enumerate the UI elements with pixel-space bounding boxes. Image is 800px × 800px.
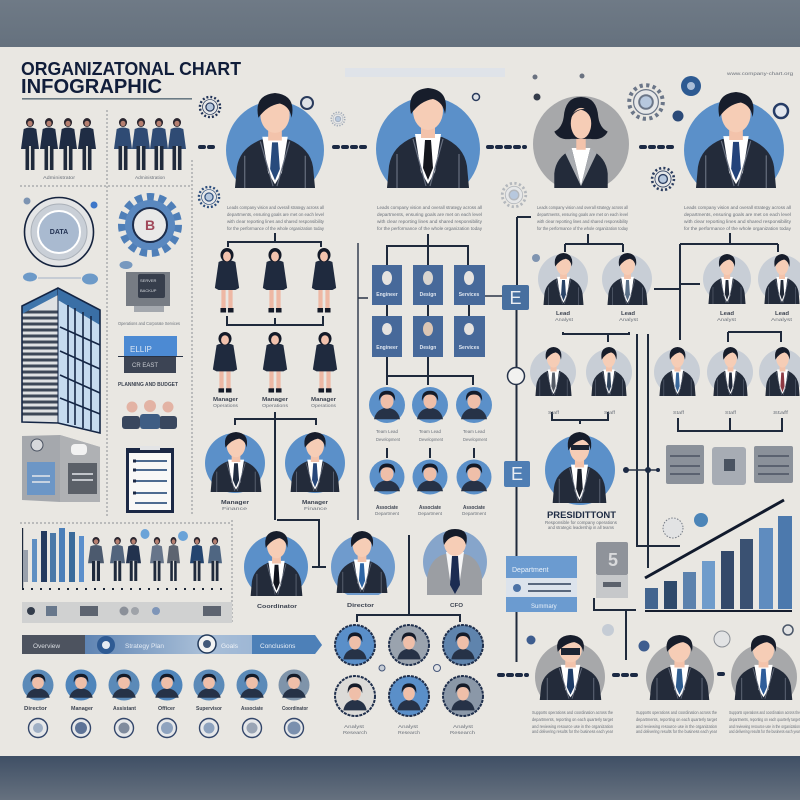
trend arrow — [645, 500, 784, 578]
blue profile cards: Engineer — [376, 292, 398, 298]
team circles row 1: Development — [376, 437, 401, 442]
connector node dots — [623, 467, 660, 473]
staff avatar row — [22, 670, 310, 712]
card: gray number: 5 — [608, 550, 618, 570]
manager bust left — [205, 432, 265, 511]
team circles row 1: Team Lead — [376, 429, 398, 434]
staff avatar row: Supervisor — [196, 706, 222, 712]
executive 3 — [533, 96, 629, 192]
small staff labels: Lead — [556, 311, 570, 317]
decorative gears — [199, 68, 794, 207]
staff avatar row: Director — [24, 706, 47, 712]
E badge 1: E — [509, 288, 522, 308]
legend strip — [22, 602, 232, 623]
description 2 — [377, 205, 483, 231]
description 3: with clear reporting lines and shared responsibility — [537, 219, 629, 224]
description 4: for the performance of the whole organization today — [684, 226, 792, 231]
staff labels: Operations — [311, 403, 337, 408]
title: INFOGRAPHIC — [21, 76, 162, 98]
description 1: for the performance of the whole organization today — [227, 226, 325, 231]
title — [21, 59, 241, 100]
small staff labels: Lead — [775, 311, 789, 317]
icon: team — [122, 400, 177, 429]
manager bust left: Finance — [222, 506, 248, 511]
bottom description 3 — [729, 710, 800, 734]
president label: and strategic leadership in all teams — [548, 525, 615, 530]
staff labels — [213, 397, 337, 408]
team circles row 2: Associate — [463, 505, 485, 511]
process arrow — [22, 635, 322, 654]
connector dots: bottom row — [499, 674, 727, 675]
bottom executive 3 — [731, 635, 797, 700]
president label: Responsible for company operations — [545, 520, 618, 525]
staff avatar row: Assistant — [113, 706, 136, 712]
portrait labels: Analyst — [453, 724, 474, 729]
staff labels: Operations — [262, 403, 289, 408]
small staff labels: Staff — [725, 410, 737, 415]
card: gray number — [596, 542, 628, 598]
portrait labels: Research — [343, 730, 368, 735]
small icons — [532, 254, 708, 538]
background: top band — [0, 0, 800, 47]
description 3 — [537, 205, 629, 231]
blue profile cards: Services — [459, 345, 480, 351]
process arrow: Goals — [221, 643, 239, 650]
label: CFO — [450, 603, 463, 609]
bottom description 1: Supports operations and coordination across the — [532, 710, 613, 715]
label: Coordinator — [257, 604, 297, 610]
connector dots: top row — [200, 145, 675, 149]
description 1 — [227, 205, 325, 231]
staff avatar row: Officer — [158, 706, 175, 712]
bottom description 1: departments, reporting on each quarterly target — [532, 717, 614, 722]
bottom executive 2 — [646, 635, 714, 700]
mid executive 1 — [244, 531, 308, 599]
team circles row 2: Associate — [376, 505, 398, 511]
icon: clipboard — [126, 446, 174, 513]
E badge 2 — [504, 461, 530, 487]
description 4: with clear reporting lines and shared responsibility — [684, 219, 792, 224]
blue profile cards: Engineer — [376, 345, 398, 351]
small staff labels: Lead — [720, 311, 734, 317]
team circles row 2: Department — [375, 511, 400, 516]
icon: clouds — [23, 261, 132, 284]
decorative gears: www.company-chart.org — [727, 71, 794, 76]
small staff labels: Staff — [604, 410, 616, 415]
team circles row 1: Development — [419, 437, 444, 442]
staff avatar row: Coordinator — [282, 706, 308, 712]
description 1: departments, ensuring goals are met on each level — [227, 212, 324, 217]
staff avatar row: Manager — [71, 706, 93, 712]
people group 2: Administration — [135, 175, 165, 180]
manager bust right — [285, 432, 345, 511]
bottom description 1: and reviewing resource use in the organization — [532, 724, 613, 729]
portrait labels: Analyst — [398, 724, 419, 729]
executive 2 — [376, 88, 480, 188]
E badge 2: E — [511, 464, 523, 484]
blue profile cards — [372, 265, 485, 357]
chart: bars and staff — [22, 528, 224, 590]
blue profile cards: Services — [459, 292, 480, 298]
bottom executive 1 — [535, 635, 605, 700]
info card: blue: Summary — [531, 604, 557, 610]
manager bust left: Manager — [221, 500, 249, 506]
bottom small icons — [526, 624, 793, 652]
people group 1 — [21, 118, 96, 180]
team circles row 2: Department — [462, 511, 487, 516]
staff row: women 1 — [215, 248, 336, 312]
process arrow: Overview — [33, 643, 60, 650]
card: blue report: CR EAST — [132, 363, 158, 369]
description 2: Leads company vision and overall strategy across all — [377, 205, 482, 210]
info card: blue — [506, 556, 577, 612]
bottom description 2: Supports operations and coordination across the — [636, 710, 717, 715]
portrait labels: Research — [450, 730, 476, 735]
caption: Operations and Corporate Services — [118, 321, 181, 326]
portrait ring grid — [335, 625, 483, 716]
manager bust right: Finance — [304, 506, 328, 511]
people group 2 — [114, 118, 186, 180]
portrait labels: Analyst — [344, 724, 365, 729]
staff labels: Manager — [311, 397, 336, 403]
icon: data badge: DATA — [50, 229, 68, 236]
team circles row 2: Associate — [419, 505, 441, 511]
manager bust right: Manager — [302, 500, 328, 506]
background: bottom band — [0, 756, 800, 800]
team circles row 2: Department — [418, 511, 443, 516]
icon: blue gear — [122, 197, 178, 253]
description 1: Leads company vision and overall strategy across all — [227, 205, 324, 210]
staff labels: Manager — [213, 397, 238, 403]
title: ORGANIZATONAL CHART — [21, 59, 241, 79]
staff busts: upper row — [538, 253, 800, 305]
blue profile cards: Design — [420, 292, 436, 298]
mid executive 2 — [331, 531, 395, 599]
description 3: Leads company vision and overall strategy across all — [537, 205, 628, 210]
bar chart: growth — [645, 500, 792, 611]
description 4: Leads company vision and overall strategy across all — [684, 205, 791, 210]
staff row: women 2 — [213, 332, 337, 393]
description 2: with clear reporting lines and shared responsibility — [377, 219, 483, 224]
description 4 — [684, 205, 792, 231]
portrait labels — [343, 724, 476, 735]
staff labels: Operations — [213, 403, 239, 408]
connector lines — [227, 217, 782, 662]
bottom description 2: and delivering results for the business each year — [636, 729, 717, 734]
label: Director — [347, 603, 374, 609]
info card: blue: Department — [512, 567, 549, 574]
dotted panel dividers — [20, 110, 232, 623]
team circles row 1: Development — [463, 437, 488, 442]
staff avatar row: Associate — [241, 706, 263, 712]
icon: server — [126, 272, 170, 312]
small staff labels: Staff — [773, 410, 789, 415]
people group 1: Administrator — [43, 175, 76, 180]
president — [545, 432, 615, 505]
executive 1 — [226, 93, 324, 188]
team circles row 2 — [370, 460, 492, 516]
bottom description 1 — [532, 710, 614, 734]
icon: blue gear: B — [145, 217, 155, 233]
icon: server: BACKUP — [140, 288, 157, 293]
description 3: departments, ensuring goals are met on each level — [537, 212, 628, 217]
bottom description 2: departments, reporting on each quarterly target — [636, 717, 718, 722]
mid executive 3 — [423, 529, 487, 595]
E badge 1 — [502, 285, 529, 310]
icon: office building — [22, 288, 100, 433]
small staff labels: Analyst — [619, 317, 639, 322]
bottom description 2: and reviewing resource use in the organization — [636, 724, 717, 729]
bottom description 2 — [636, 710, 718, 734]
small staff labels: Staff — [673, 410, 685, 415]
small staff labels: Analyst — [717, 317, 737, 322]
gray info cards — [666, 445, 793, 485]
description 2: departments, ensuring goals are met on each level — [377, 212, 482, 217]
staff busts: lower row — [530, 347, 800, 396]
bottom description 1: and delivering results for the business each year — [532, 729, 613, 734]
card: blue report — [118, 336, 183, 373]
icon: server: SERVER — [140, 278, 156, 283]
description 1: with clear reporting lines and shared responsibility — [227, 219, 325, 224]
caption: PLANNING AND BUDGET — [118, 382, 178, 388]
description 4: departments, ensuring goals are met on each level — [684, 212, 791, 217]
president label: PRESIDITTONT — [547, 510, 617, 520]
description 2: for the performance of the whole organization today — [377, 226, 483, 231]
team circles row 1: Team Lead — [463, 429, 485, 434]
icon: data badge — [24, 198, 98, 266]
staff labels: Manager — [262, 397, 288, 403]
small staff labels — [548, 311, 793, 415]
executive 4 — [684, 92, 784, 188]
node: ring marker — [508, 368, 524, 384]
blue profile cards: Design — [420, 345, 436, 351]
team circles row 1: Team Lead — [419, 429, 441, 434]
small staff labels: Lead — [621, 311, 635, 317]
president label — [545, 510, 618, 530]
description 3: for the performance of the whole organization today — [537, 226, 629, 231]
small staff labels: Analyst — [555, 317, 574, 322]
icon row — [28, 718, 304, 738]
small staff labels: Staff — [548, 410, 560, 415]
icon: archive box — [22, 435, 100, 502]
card: blue report: ELLIP — [130, 345, 152, 354]
small staff labels: Analyst — [771, 317, 793, 322]
process arrow: Strategy Plan — [125, 643, 164, 650]
team circles row 1 — [369, 387, 492, 442]
portrait labels: Research — [398, 730, 420, 735]
process arrow: Conclusions — [260, 643, 296, 650]
